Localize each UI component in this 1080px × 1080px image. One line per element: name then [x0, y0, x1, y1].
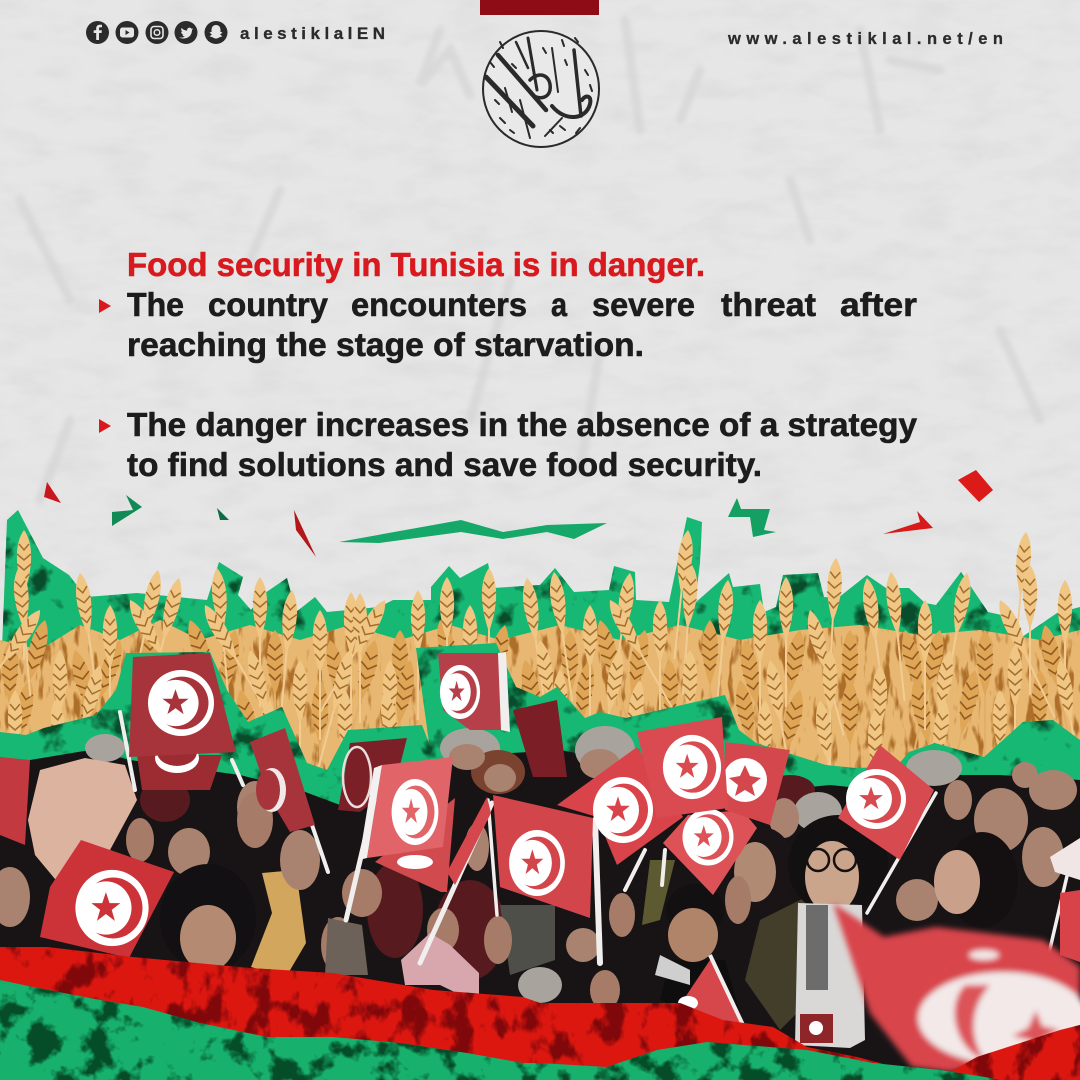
text block: first point — [127, 286, 917, 363]
woman with dark hair — [934, 832, 1018, 928]
flag poles — [120, 712, 1067, 966]
flag: far left edge — [0, 757, 30, 845]
text block: first point: The — [127, 286, 184, 323]
raised hands — [126, 792, 751, 1010]
boy — [655, 884, 745, 1030]
woman in dark hijab — [734, 828, 795, 912]
flag: center small — [663, 808, 757, 895]
flag: upper left back — [137, 738, 222, 790]
icon: snapchat — [204, 21, 228, 44]
flag: center upper large — [637, 717, 728, 818]
headline block — [99, 246, 918, 483]
girl in black hijab — [160, 864, 256, 972]
flag: lower back center — [375, 798, 455, 892]
flag: lower left — [40, 840, 174, 958]
flag: right waved — [838, 745, 934, 860]
crowd photo — [0, 652, 1080, 1080]
icon: instagram — [146, 21, 168, 44]
flag: lower center — [493, 795, 593, 918]
crowd dark base — [0, 750, 1080, 1080]
grey sleeve — [325, 918, 368, 975]
flag: narrow left center — [250, 728, 315, 832]
text block: first point: threat — [721, 286, 816, 323]
flag: center top — [723, 742, 790, 825]
text block: second point: The danger increases in the absence of a strategy — [127, 406, 918, 443]
flag: diagonal strip — [447, 797, 491, 885]
pink scarf — [401, 933, 479, 1004]
icon: facebook — [86, 21, 109, 44]
flag: center main — [359, 757, 453, 860]
flag: top center — [438, 652, 510, 732]
social handle: alestiklalEN — [240, 24, 385, 43]
text block: first point: encounters — [351, 286, 527, 323]
website url: www.alestiklal.net/en — [727, 30, 1003, 48]
dark red clothing tones — [140, 775, 815, 980]
torn red paper band — [0, 947, 1080, 1080]
torn green paper band — [0, 980, 1000, 1080]
flag: blurred foreground — [833, 903, 1080, 1072]
olive sleeve — [642, 860, 675, 925]
text block: second point: to find solutions and save food security. — [127, 446, 762, 483]
flag: maroon beside top center — [513, 700, 567, 777]
flag: upper left large — [129, 653, 236, 757]
text block: first point: severe — [592, 286, 695, 323]
torn green paper in front of wheat — [0, 643, 1080, 850]
wheat field — [0, 529, 1080, 840]
olive jacket — [745, 895, 810, 1030]
torn green paper behind wheat — [0, 510, 1080, 700]
text block: second point — [127, 406, 918, 483]
logo: calligraphy roundel — [483, 31, 599, 147]
icon: twitter — [174, 21, 198, 44]
beige hijab — [28, 758, 137, 885]
crowd faces — [0, 744, 1077, 962]
icon: youtube — [116, 21, 138, 44]
social media row — [86, 21, 385, 44]
bullet arrow 1 — [99, 299, 111, 313]
heading: red lead line: Food security in Tunisia is in danger. — [127, 246, 705, 283]
yellow sleeve — [251, 870, 306, 977]
top maroon tab — [480, 0, 599, 15]
flag: small near boy — [676, 955, 743, 1028]
text block: first point: after — [840, 286, 917, 323]
bullet arrow 2 — [99, 419, 111, 433]
text block: first point: country — [208, 286, 329, 323]
text block: first point: reaching the stage of starvation. — [127, 326, 644, 363]
checked scarf — [500, 905, 555, 975]
flag: right edge small — [1050, 838, 1080, 962]
floating confetti shards — [44, 470, 993, 557]
brown head scarf — [471, 750, 525, 794]
flag: dark center left — [338, 738, 407, 812]
girl with glasses and keffiyeh — [788, 815, 888, 1048]
background head coverings — [85, 726, 962, 1003]
text block: first point: a — [551, 286, 568, 323]
flag: center diagonal — [557, 747, 683, 865]
